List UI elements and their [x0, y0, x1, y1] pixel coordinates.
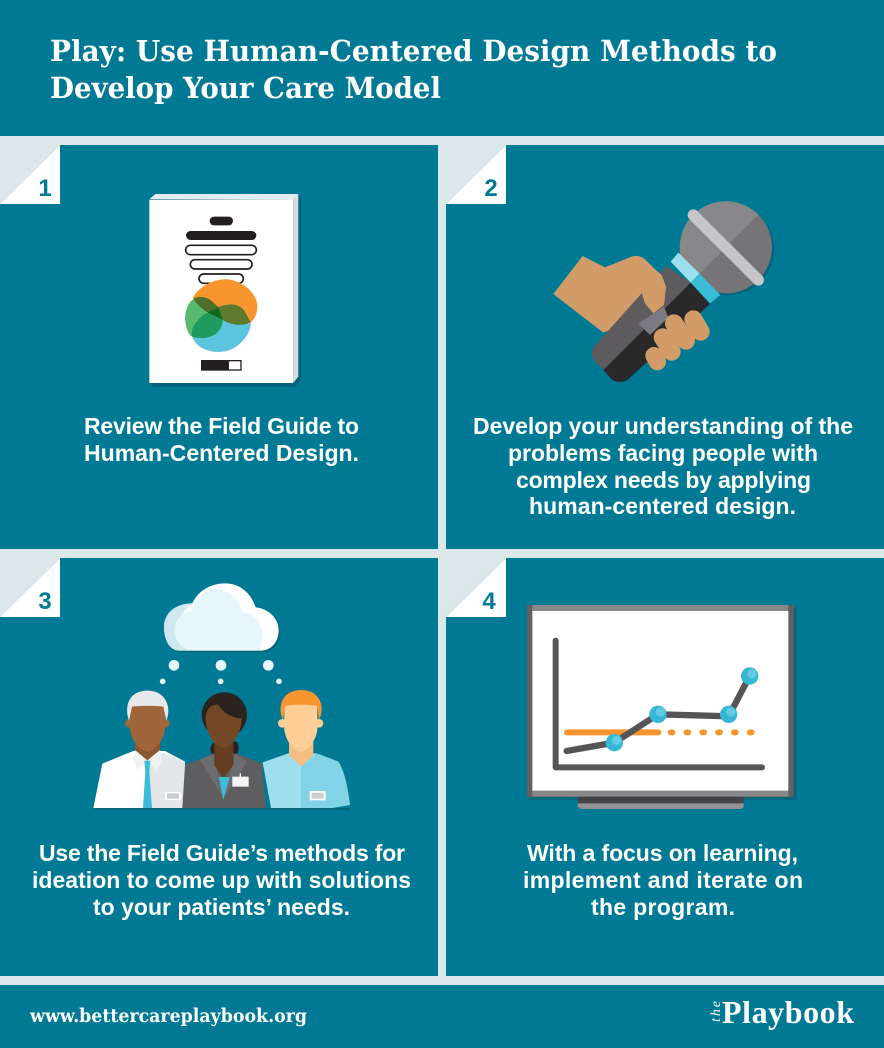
step 1 text: Human-Centered Design.: [84, 440, 359, 466]
website address: www.bettercareplaybook.org: [29, 1005, 307, 1027]
step 4 text: implement and iterate on: [523, 867, 803, 893]
step 2 number tab: [446, 145, 506, 204]
icon: line chart on presentation screen: [527, 605, 796, 809]
palm: [553, 256, 666, 333]
step 3 text: Use the Field Guide’s methods for: [39, 840, 405, 866]
thought dots: [160, 660, 282, 684]
step 2 text: Develop your understanding of the: [473, 413, 853, 439]
step 4 text: the program.: [591, 894, 735, 920]
icon: field guide book: [149, 194, 301, 387]
panel: step 2: [446, 145, 884, 549]
icon: care team with shared idea cloud: [93, 583, 350, 810]
cloud: [164, 583, 280, 652]
step 1 text: [84, 413, 359, 466]
step 4 number tab: 4: [482, 588, 496, 615]
title: Develop Your Care Model: [50, 71, 441, 105]
step 2 text: human-centered design.: [529, 493, 796, 519]
step 2 text: [473, 413, 853, 519]
person: man in blue scrubs: [263, 690, 350, 808]
step 3 text: ideation to come up with solutions: [32, 867, 411, 893]
title: Play: Use Human-Centered Design Methods to: [50, 34, 777, 68]
step 1 text: Review the Field Guide to: [84, 413, 359, 439]
icon: hand holding microphone: [553, 201, 774, 382]
person: woman in grey suit: [182, 692, 266, 808]
chart axes: [556, 641, 762, 767]
panel: step 4: [446, 558, 884, 976]
microphone handle: [592, 253, 720, 382]
footer band: [0, 985, 884, 1048]
person: man in white shirt and tie: [93, 691, 185, 808]
step 2 text: problems facing people with: [508, 440, 818, 466]
screen frame: [527, 605, 796, 809]
step 2 text: complex needs by applying: [516, 467, 811, 493]
step 3 number tab: [0, 558, 60, 617]
logo: the Playbook: Playbook: [722, 994, 854, 1030]
panel: step 3: [0, 558, 438, 976]
step 4 text: With a focus on learning,: [527, 840, 798, 866]
data line and points: [567, 667, 758, 751]
panel: step 1: [0, 145, 438, 549]
header band: [0, 0, 884, 136]
step 3 text: to your patients’ needs.: [93, 894, 350, 920]
step 1 number tab: [0, 145, 60, 204]
microphone head: [680, 201, 774, 295]
step 3 text: [32, 840, 411, 920]
step 2 number tab: 2: [484, 175, 498, 202]
thumb and fingers: [638, 267, 701, 362]
title: [50, 34, 777, 105]
step 1 number tab: 1: [38, 175, 52, 202]
step 3 number tab: 3: [38, 588, 52, 615]
step 4 text: [523, 840, 803, 920]
logo: the Playbook: the: [709, 1001, 724, 1022]
target line: [567, 723, 752, 741]
step 4 number tab: [446, 558, 506, 617]
